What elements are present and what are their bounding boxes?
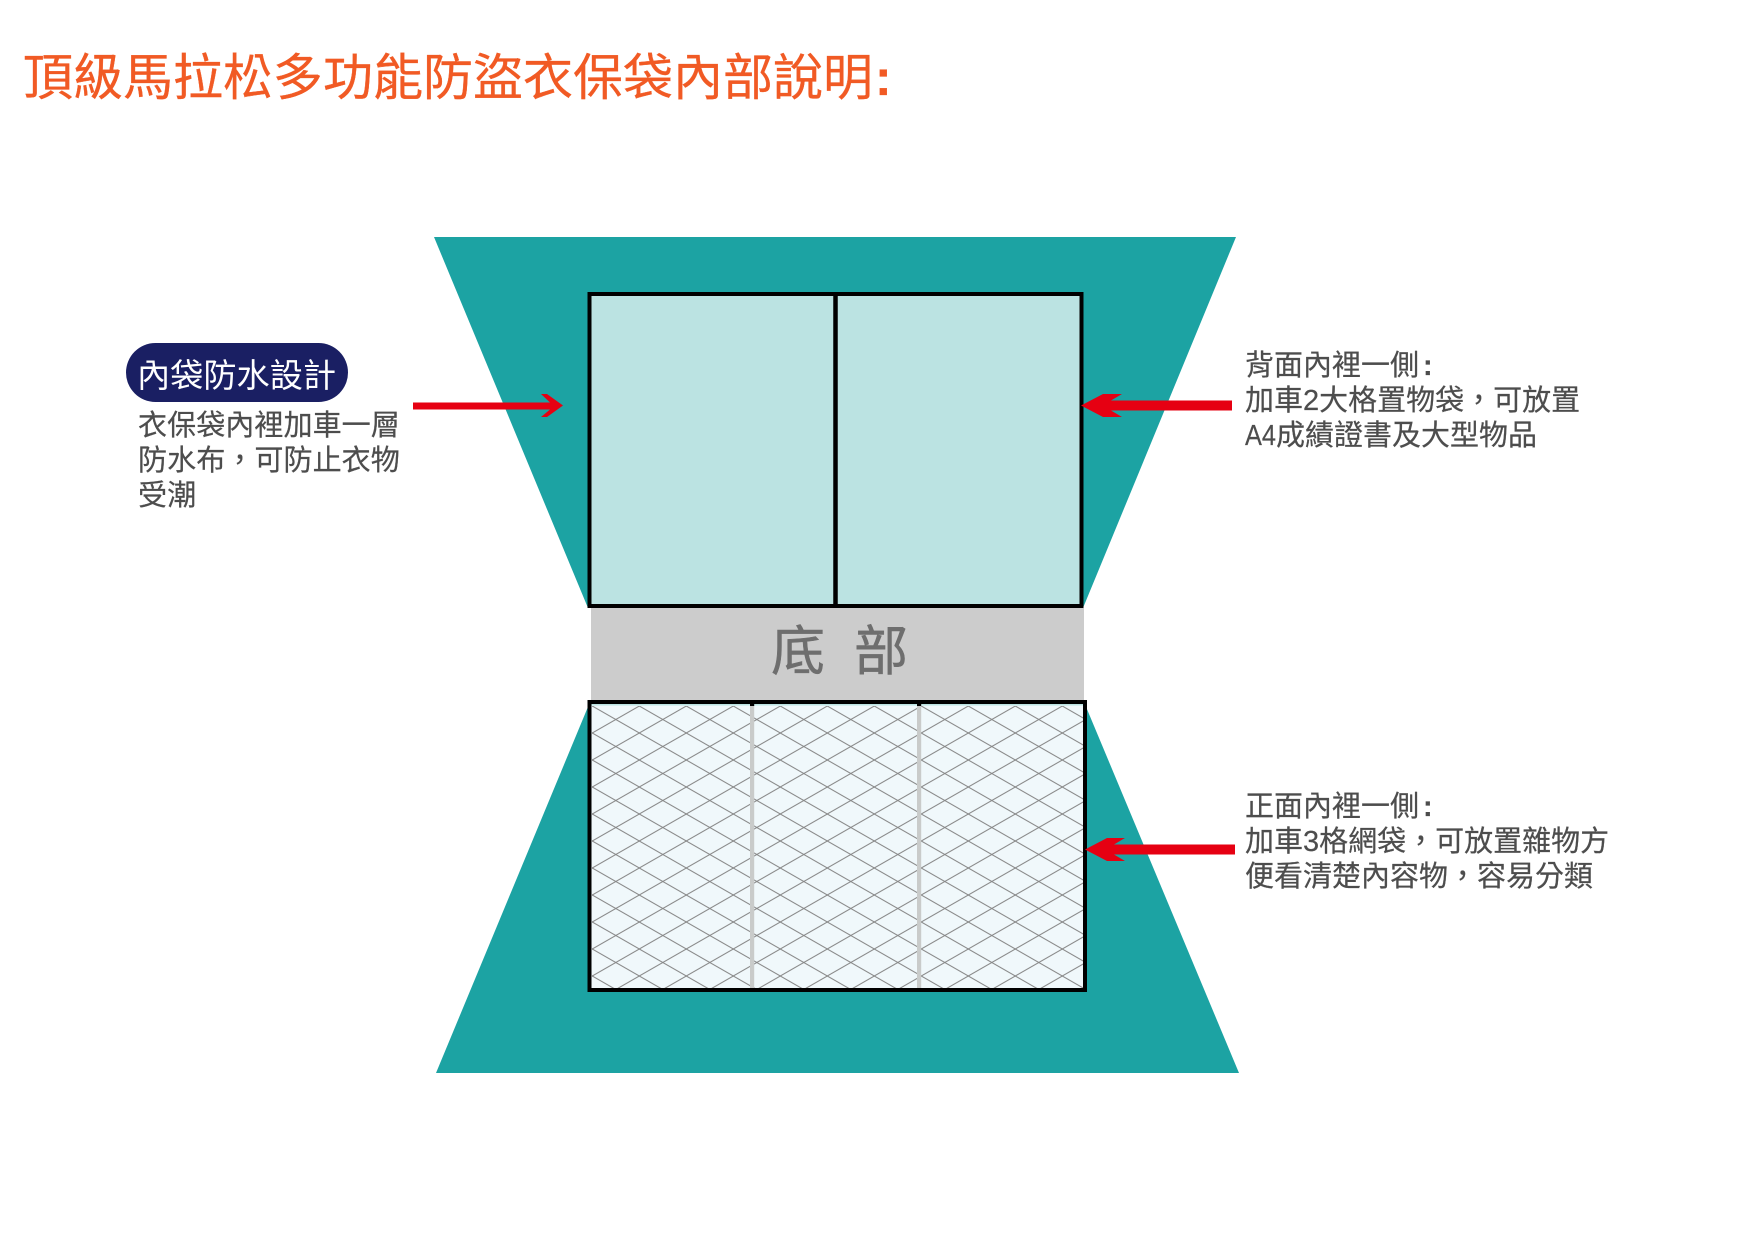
callout: waterproof design bbox=[126, 343, 408, 512]
text block: front lining description: 便看清楚內容物，容易分類 bbox=[1245, 860, 1593, 893]
panel: top teal trapezoid bbox=[434, 237, 1236, 608]
panel: bottom teal trapezoid bbox=[436, 702, 1239, 1073]
panel: front lining three mesh pockets bbox=[590, 702, 1085, 990]
badge: waterproof design: 內袋防水設計 bbox=[137, 358, 336, 395]
diagram: bag interior bbox=[434, 237, 1239, 1073]
text block: back lining description: A4成績證書及大型物品 bbox=[1245, 420, 1537, 452]
arrow: back lining callout bbox=[1081, 394, 1232, 417]
panel: bottom base: 底部 bbox=[771, 622, 908, 682]
badge: waterproof design bbox=[126, 343, 348, 402]
text block: waterproof description: 防水布，可防止衣物 bbox=[138, 444, 400, 477]
text block: front lining description: 加車3格網袋，可放置雜物方 bbox=[1245, 825, 1609, 858]
text block: back lining description: 加車2大格置物袋，可放置 bbox=[1245, 384, 1580, 417]
text block: back lining description: 背面內裡一側: bbox=[1245, 350, 1433, 382]
panel: back lining two large pockets bbox=[590, 294, 1082, 606]
panel: bottom base bbox=[591, 608, 1084, 700]
arrow: waterproof callout to back lining bbox=[413, 394, 563, 417]
text block: waterproof description: 受潮 bbox=[138, 479, 196, 512]
text block: waterproof description: 衣保袋內裡加車一層 bbox=[138, 409, 400, 442]
text block: front lining description: 正面內裡一側: bbox=[1245, 791, 1433, 823]
arrow: front lining callout bbox=[1085, 838, 1235, 861]
title: 頂級馬拉松多功能防盜衣保袋內部說明: bbox=[23, 50, 892, 106]
